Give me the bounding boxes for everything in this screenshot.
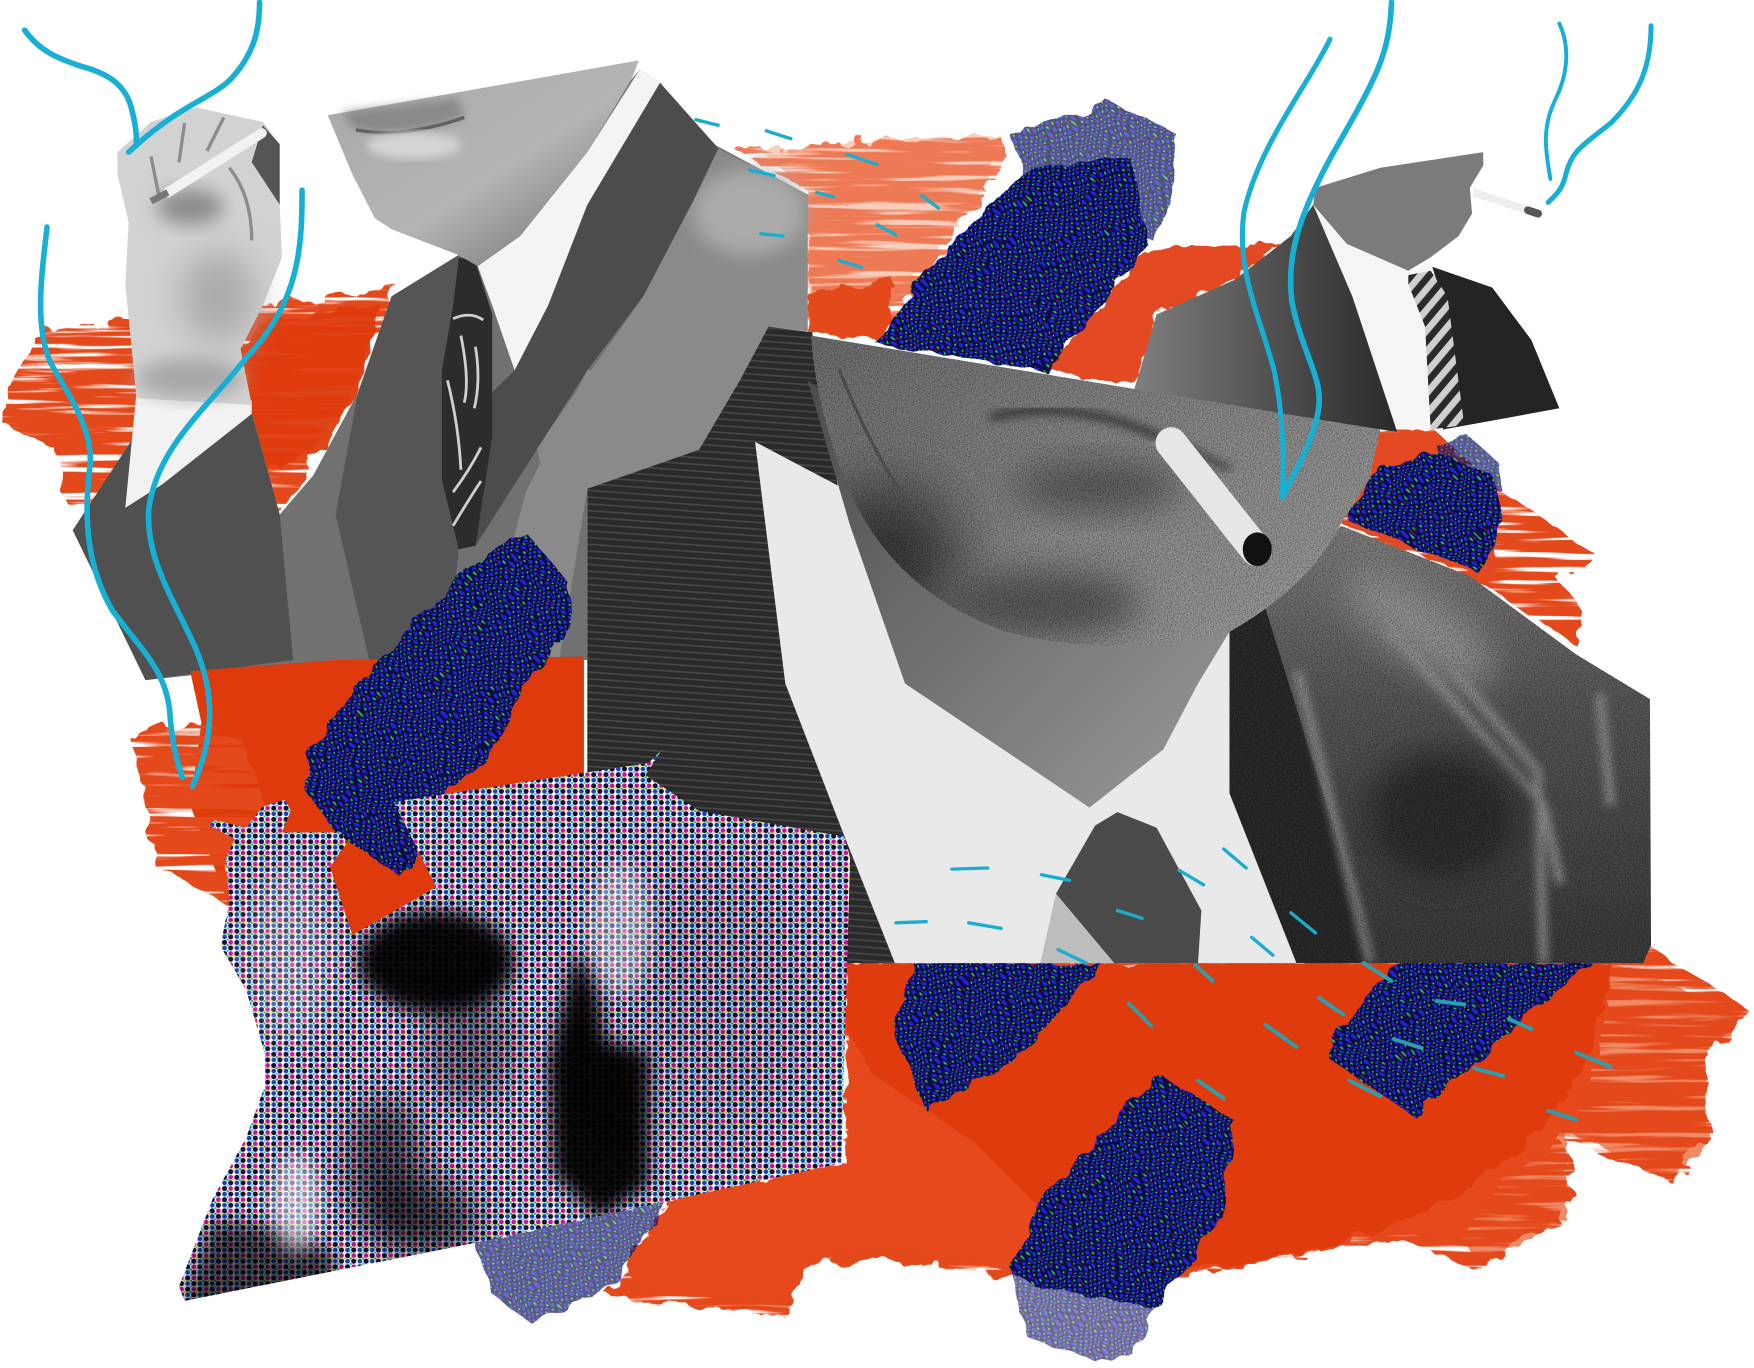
halftone stroke: top centre (877, 101, 1173, 370)
halftone stroke: centre left (308, 532, 571, 876)
halftone stroke: bottom (1011, 1076, 1235, 1360)
left jacket (1134, 205, 1397, 432)
halftone brush strokes behind figures (475, 101, 1593, 1360)
figure: large man with cigarette, centre (587, 324, 1667, 973)
brush stroke: upper left (2, 287, 399, 515)
striped necktie (1408, 271, 1464, 430)
right jacket (1431, 266, 1559, 430)
brush stroke: top centre (738, 135, 1007, 341)
brush stroke: right of big figure (1341, 432, 1595, 645)
brush stroke: bottom outer (610, 945, 1749, 1317)
cigarette in mouth (1473, 192, 1538, 214)
smoke lines: cyan (25, 2, 1651, 786)
right coat (1219, 515, 1667, 973)
halftone stroke: right (1347, 432, 1503, 572)
cigarette in hand (151, 133, 262, 201)
smoke line: big man right (1282, 2, 1392, 498)
brush stroke: bottom core (626, 963, 1611, 1303)
cigarette in mouth (1171, 443, 1272, 566)
necktie (1040, 812, 1201, 963)
jacket right panel (537, 149, 808, 559)
smoke line: big man left (1242, 39, 1330, 498)
white cuff (125, 391, 252, 508)
jacket shoulder highlight (694, 170, 805, 255)
necktie (442, 257, 492, 549)
smoke line: hand right curl (129, 2, 260, 152)
lapel (447, 83, 718, 546)
mouth (341, 98, 464, 159)
left jacket panel (336, 255, 459, 660)
white shirt and collar (755, 442, 1296, 963)
tonal shading (179, 861, 817, 1309)
halftone stroke: lower left (894, 963, 1101, 1112)
smoke line: small man right (1548, 26, 1651, 202)
smoke line: small man left (1546, 23, 1566, 179)
smoke dashes (696, 120, 1315, 963)
white shirt (478, 69, 660, 370)
raised hand (117, 107, 282, 405)
neck (808, 380, 1229, 808)
face (328, 60, 639, 266)
face and chin (805, 324, 1387, 660)
shirt (1313, 205, 1436, 430)
figure: man holding cigarette, top left (73, 60, 808, 680)
smoke line: hand left curl (25, 30, 137, 145)
brush stroke: behind small figure (1045, 244, 1280, 386)
smoke line: far left (41, 227, 182, 777)
red block over lower left (190, 657, 584, 935)
halftone stroke: lower right (1330, 963, 1593, 1116)
face (1313, 152, 1483, 271)
halftone photo: hand and suit (168, 738, 861, 1309)
red brush fringe left of block (129, 723, 280, 906)
smoke dashes on red (1129, 963, 1611, 1120)
smoke line: near left (149, 190, 302, 786)
lower lapel light band (481, 369, 649, 660)
figure: small man with cigarette, top right (1134, 152, 1559, 432)
ribbed coat left (587, 327, 928, 963)
suit jacket (73, 69, 808, 680)
sleeve (73, 414, 293, 680)
halftone stroke: under halftone photo (475, 1199, 671, 1323)
